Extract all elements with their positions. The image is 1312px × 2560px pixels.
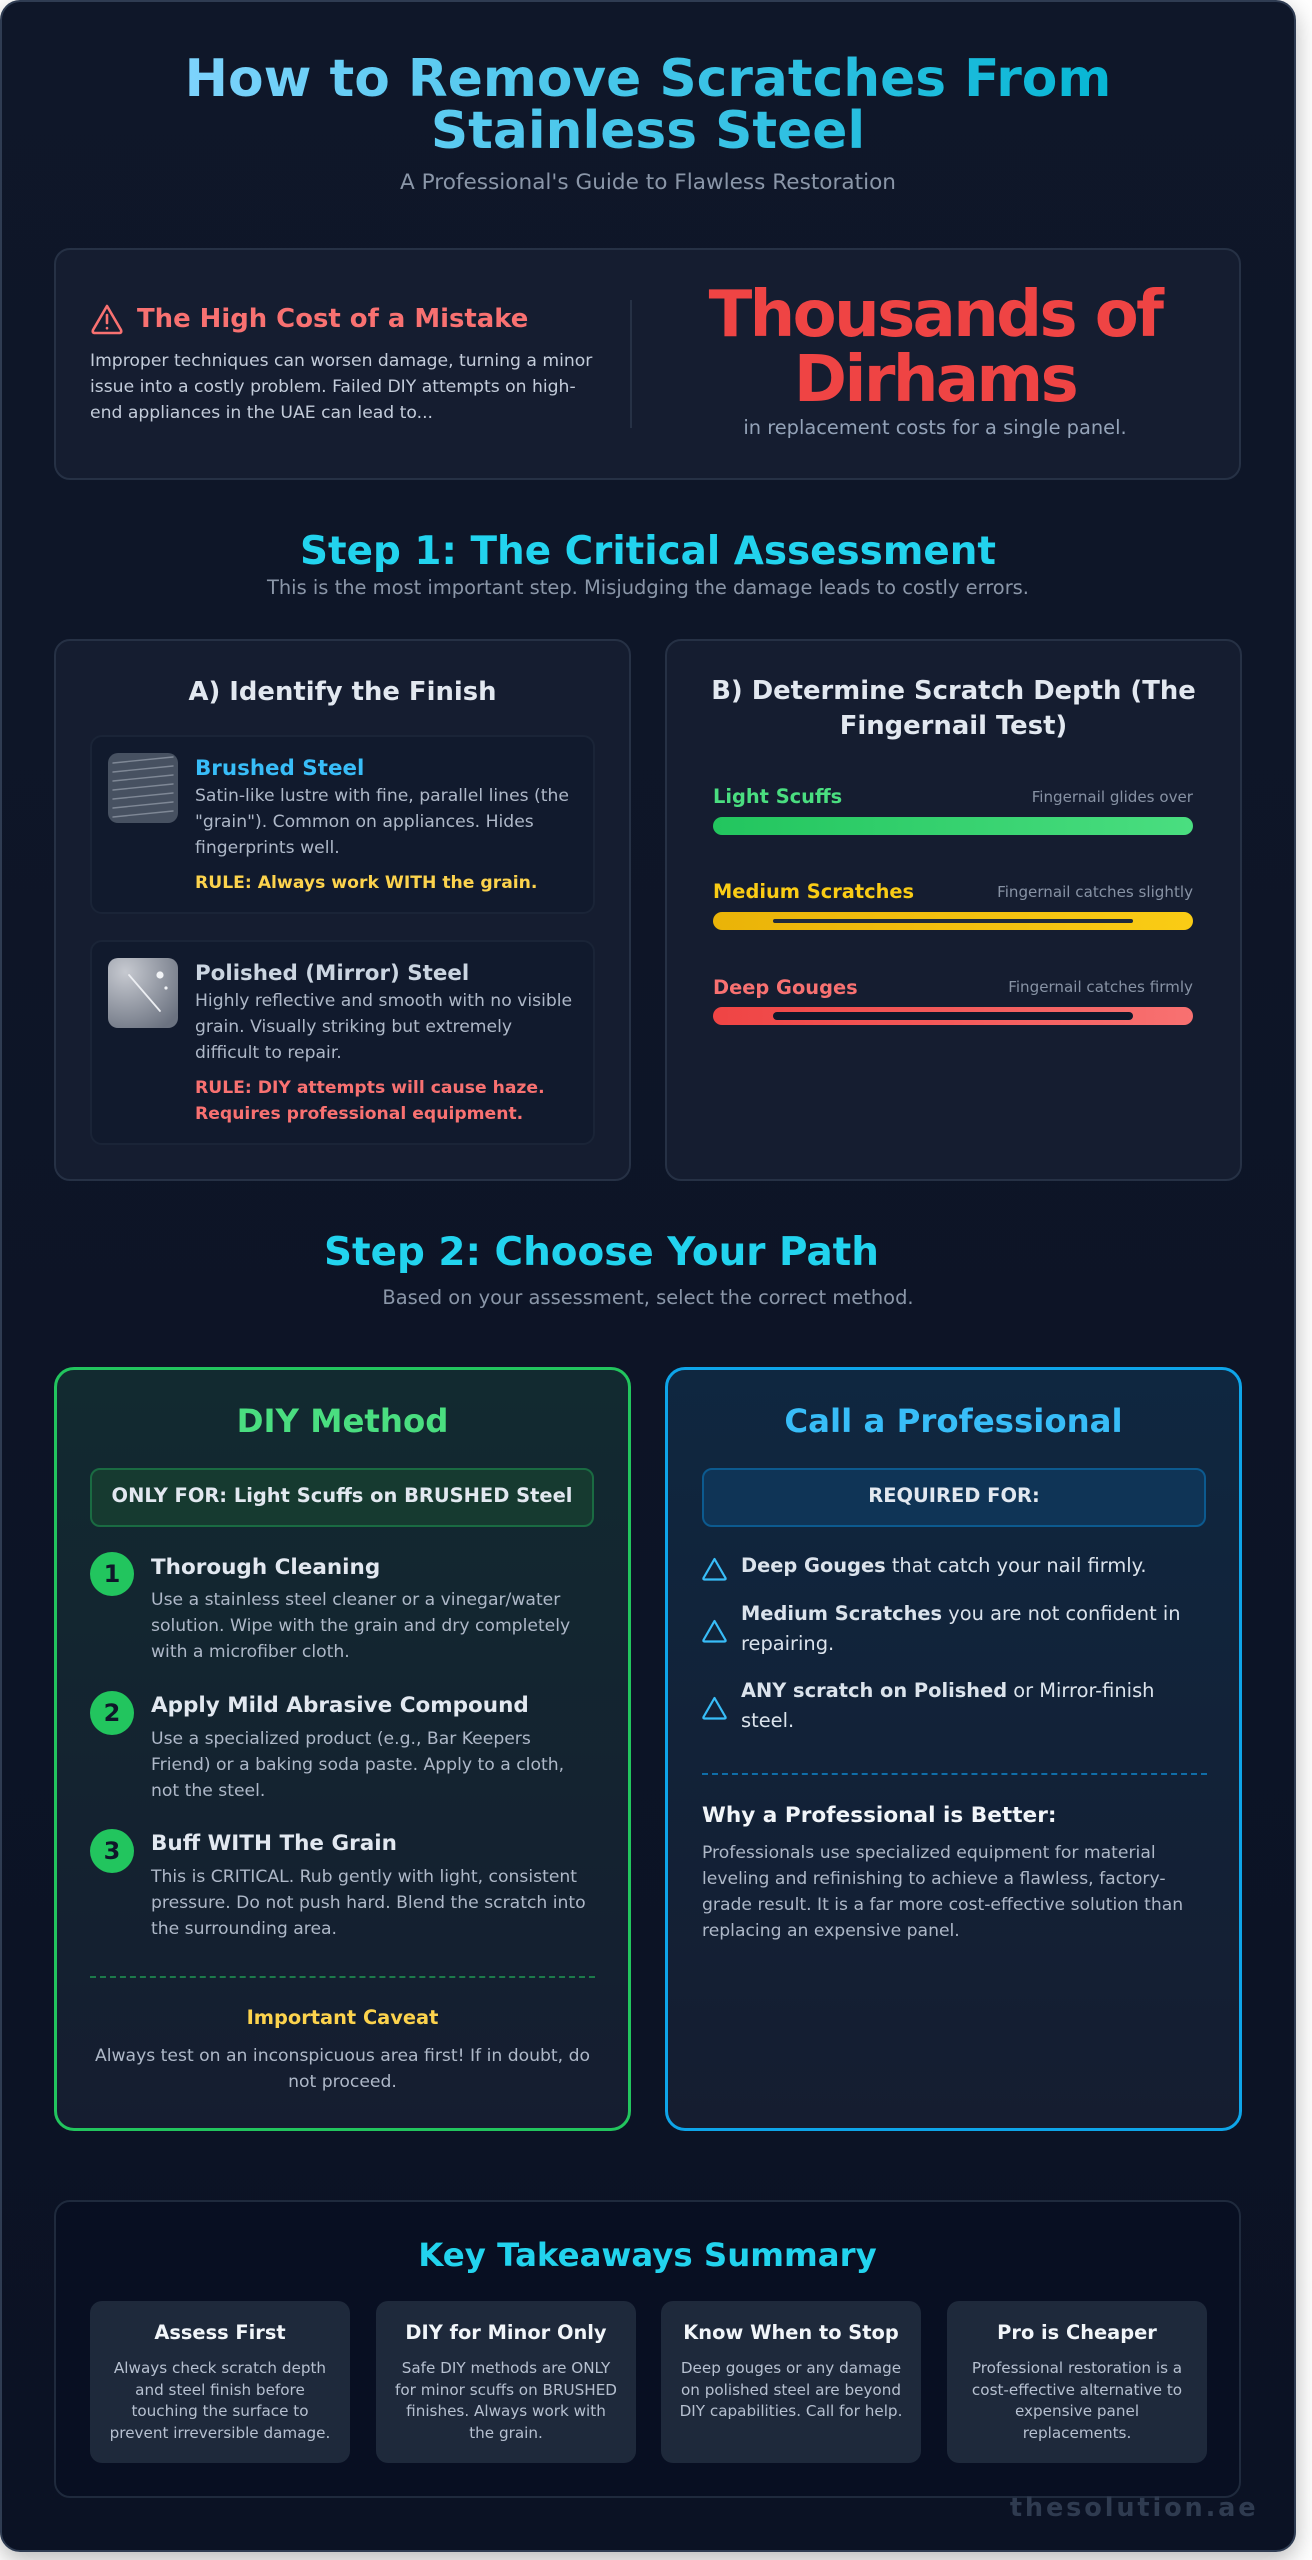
text: brushed steel description (195, 786, 569, 858)
text: Deep Gouges that catch your nail firmly. (741, 1554, 1146, 1577)
card text: expensive panel (1015, 2402, 1139, 2420)
heading: DIY method: DIY Method (237, 1402, 448, 1440)
text: polished steel description: difficult to repair. (195, 1043, 342, 1063)
panel: scratch depth (665, 639, 1242, 1181)
text (741, 1602, 1181, 1655)
step 1 text: solution. Wipe with the grain and dry completely (151, 1616, 570, 1636)
panel: high cost of a mistake (54, 248, 1241, 480)
badge: required for: REQUIRED FOR: (868, 1484, 1040, 1507)
takeaway card: know when to stop (661, 2301, 921, 2463)
step 1 text: with a microfiber cloth. (151, 1642, 350, 1662)
label: deep gouges: Deep Gouges (713, 976, 858, 999)
number badge 3: 3 (104, 1837, 120, 1865)
panel: key takeaways (54, 2200, 1241, 2498)
heading: determine scratch depth: B) Determine Scratch Depth (The (711, 676, 1196, 706)
text: why professional: grade result. It is a far more cost-effective solution than (702, 1895, 1183, 1915)
card text (110, 2359, 330, 2442)
text: caveat: Always test on an inconspicuous area first! If in doubt, do (95, 2046, 590, 2066)
step 3 text: the surrounding area. (151, 1919, 337, 1939)
icon: polished steel swatch (108, 958, 178, 1028)
step 2 text: not the steel. (151, 1781, 265, 1801)
watermark: thesolution.ae: thesolution.ae (1010, 2493, 1258, 2523)
icon: triangle (702, 1558, 727, 1581)
text: step 2 subtitle: Based on your assessment, select the correct method. (382, 1286, 914, 1309)
heading: the high cost of a mistake: The High Cost of a Mistake (137, 304, 528, 334)
text: caveat: not proceed. (288, 2072, 397, 2092)
heading: step 2: Step 2: Choose Your Path (324, 1230, 879, 1275)
title: Stainless Steel (431, 101, 865, 161)
text: brushed steel description: "grain"). Common on appliances. Hides (195, 812, 534, 832)
step 3 text (150, 1867, 586, 1939)
text: why professional: leveling and refinishing to achieve a flawless, factory- (702, 1869, 1166, 1889)
text: caveat (95, 2046, 590, 2092)
list item: any scratch on polished (702, 1679, 1154, 1732)
heading: why a professional is better: Why a Professional is Better: (702, 1803, 1056, 1828)
big number: thousands of dirhams: Thousands of (709, 278, 1161, 352)
heading: brushed steel: Brushed Steel (195, 756, 364, 781)
step 2 text: Friend) or a baking soda paste. Apply to a cloth, (151, 1755, 564, 1775)
step 2 text (151, 1729, 564, 1801)
text: brushed steel description: fingerprints well. (195, 838, 340, 858)
step 2 heading: Apply Mild Abrasive Compound (151, 1693, 529, 1718)
text (741, 1679, 1154, 1732)
step 2: apply compound (90, 1691, 564, 1801)
badge: only for light scuffs (90, 1468, 594, 1527)
card text: the grain. (469, 2424, 543, 2442)
card text: DIY capabilities. Call for help. (680, 2402, 902, 2420)
text: why professional: Professionals use specialized equipment for material (702, 1843, 1156, 1863)
note: fingernail glides over: Fingernail glides over (1032, 788, 1193, 806)
heading: determine scratch depth (711, 676, 1196, 741)
bar: medium scratches (713, 912, 1193, 930)
step 1 heading: Thorough Cleaning (151, 1555, 380, 1580)
text: steel. (741, 1709, 794, 1732)
rule: polished steel (195, 1078, 545, 1124)
text: mistake description: end appliances in the UAE can lead to... (90, 403, 433, 423)
number badge 1 (90, 1552, 134, 1596)
text: polished steel description: Highly reflective and smooth with no visible (195, 991, 572, 1011)
text: polished steel description: grain. Visually striking but extremely (195, 1017, 512, 1037)
step 3 text: This is CRITICAL. Rub gently with light, consistent (151, 1867, 577, 1887)
text: mistake description: Improper techniques can worsen damage, turning a minor (90, 351, 592, 371)
step 2 text: Use a specialized product (e.g., Bar Keepers (151, 1729, 531, 1749)
item: brushed steel (90, 735, 595, 914)
number badge 2: 2 (104, 1699, 120, 1727)
card text: and steel finish before (135, 2381, 305, 2399)
card text: Safe DIY methods are ONLY (402, 2359, 610, 2377)
note: fingernail catches slightly: Fingernail catches slightly (997, 883, 1193, 901)
text: repairing. (741, 1632, 834, 1655)
rule: polished steel: RULE: DIY attempts will cause haze. (195, 1078, 545, 1098)
panel: DIY method (54, 1367, 631, 2131)
text: polished steel description (195, 991, 572, 1063)
bar: deep gouges (713, 1007, 1193, 1025)
panel: identify the finish (54, 639, 631, 1181)
icon: warning triangle (91, 304, 123, 334)
text: mistake description (90, 351, 592, 423)
note: fingernail catches firmly: Fingernail catches firmly (1008, 978, 1193, 996)
bar: light scuffs (713, 817, 1193, 835)
card heading: Pro is Cheaper (997, 2321, 1157, 2344)
card text: prevent irreversible damage. (110, 2424, 330, 2442)
rule: polished steel: Requires professional equipment. (195, 1104, 523, 1124)
text: why professional: replacing an expensive panel. (702, 1921, 960, 1941)
list item: deep gouges (702, 1554, 1146, 1581)
card heading: DIY for Minor Only (405, 2321, 607, 2344)
text: ANY scratch on Polished or Mirror-finish (741, 1679, 1154, 1702)
list item: medium scratches (702, 1602, 1181, 1655)
label: medium scratches: Medium Scratches (713, 880, 914, 903)
card heading: Assess First (154, 2321, 286, 2344)
number badge 3 (90, 1829, 134, 1873)
card text: finishes. Always work with (406, 2402, 606, 2420)
heading: identify the finish: A) Identify the Finish (188, 677, 496, 707)
card text (395, 2359, 617, 2442)
step 3 heading: Buff WITH The Grain (151, 1831, 397, 1856)
title (0, 53, 1296, 157)
text: why professional (702, 1843, 1183, 1941)
card text: touching the surface to (131, 2402, 309, 2420)
card text: on polished steel are beyond (681, 2381, 901, 2399)
text: step 1 subtitle: This is the most important step. Misjudging the damage leads to costly errors. (267, 576, 1029, 599)
icon: brushed steel swatch (108, 753, 178, 823)
takeaway card: pro is cheaper (947, 2301, 1207, 2463)
card text: cost-effective alternative to (972, 2381, 1182, 2399)
card text: for minor scuffs on BRUSHED (395, 2381, 617, 2399)
card text: Professional restoration is a (972, 2359, 1182, 2377)
text: brushed steel description: Satin-like lustre with fine, parallel lines (the (195, 786, 569, 806)
step 1: thorough cleaning (90, 1552, 570, 1662)
card heading: Know When to Stop (683, 2321, 899, 2344)
subtitle: A Professional's Guide to Flawless Restoration (400, 170, 896, 195)
text: mistake description: issue into a costly problem. Failed DIY attempts on high- (90, 377, 576, 397)
divider (630, 300, 632, 428)
number badge 1: 1 (104, 1560, 120, 1588)
heading: determine scratch depth: Fingernail Test) (840, 711, 1067, 741)
heading: key takeaways summary: Key Takeaways Summary (418, 2236, 877, 2274)
badge: required for (702, 1468, 1206, 1527)
text: Medium Scratches you are not confident in (741, 1602, 1181, 1625)
step 1 text: Use a stainless steel cleaner or a vinegar/water (151, 1590, 560, 1610)
item: polished steel (90, 940, 595, 1145)
card text: Deep gouges or any damage (681, 2359, 901, 2377)
card text (680, 2359, 902, 2420)
card text: Always check scratch depth (114, 2359, 326, 2377)
title: How to Remove Scratches From (185, 49, 1111, 109)
badge: only for light scuffs: ONLY FOR: Light Scuffs on BRUSHED Steel (112, 1484, 572, 1507)
label: light scuffs: Light Scuffs (713, 785, 842, 808)
heading: step 1: Step 1: The Critical Assessment (300, 529, 996, 574)
number badge 2 (90, 1691, 134, 1735)
text: replacement costs: in replacement costs for a single panel. (743, 416, 1127, 439)
panel: call a professional (665, 1367, 1242, 2131)
step 3 text: pressure. Do not push hard. Blend the scratch into (151, 1893, 586, 1913)
icon: triangle (702, 1620, 727, 1643)
step 3: buff with the grain (90, 1829, 586, 1939)
takeaway card: DIY for minor only (376, 2301, 636, 2463)
big number: thousands of dirhams (708, 278, 1165, 417)
heading: important caveat: Important Caveat (247, 2006, 438, 2029)
step 1 text (151, 1590, 570, 1662)
heading: call a professional: Call a Professional (784, 1402, 1123, 1440)
card text: replacements. (1023, 2424, 1131, 2442)
icon: triangle (702, 1696, 727, 1720)
takeaway card: assess first (90, 2301, 350, 2463)
big number: thousands of dirhams: Dirhams (794, 343, 1076, 417)
heading: polished steel: Polished (Mirror) Steel (195, 961, 469, 986)
card text (972, 2359, 1182, 2442)
rule: brushed steel: RULE: Always work WITH the grain. (195, 873, 537, 893)
